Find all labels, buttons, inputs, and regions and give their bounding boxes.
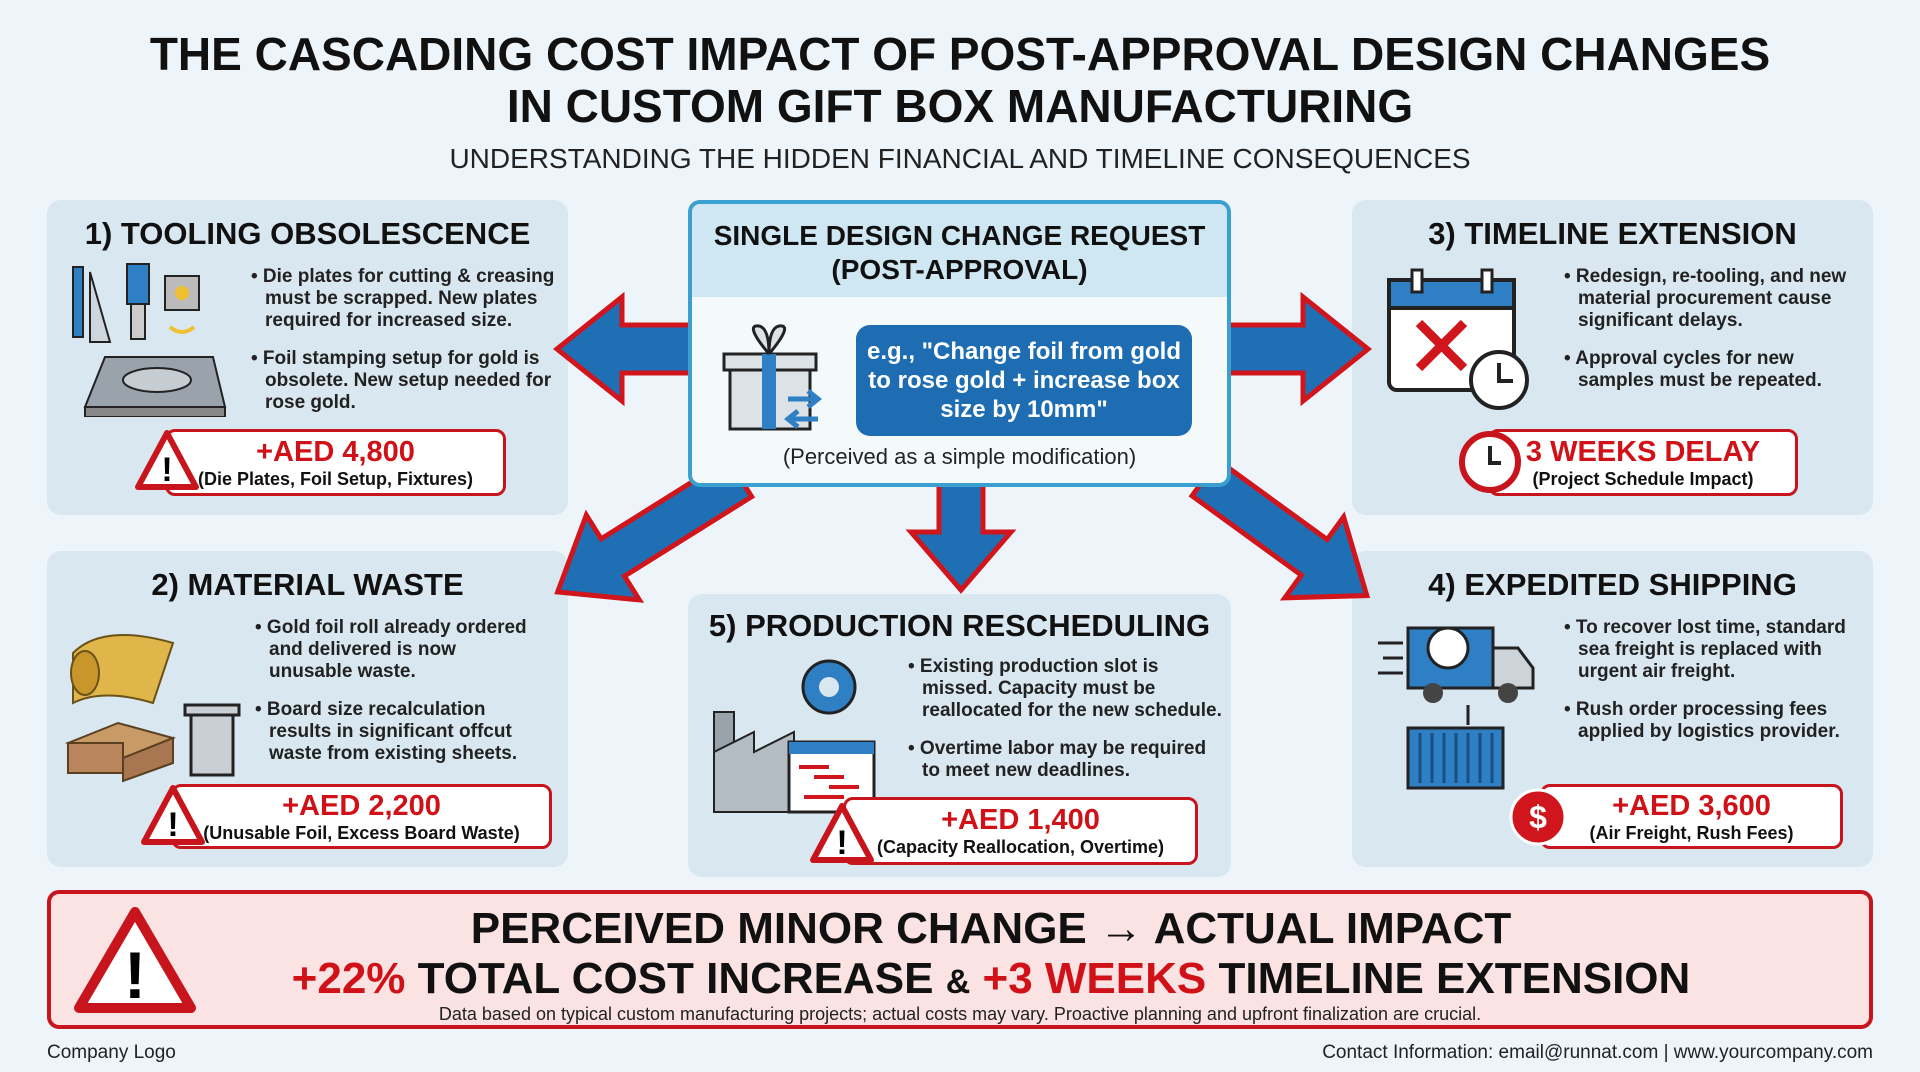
icon: warning: ! [167,806,179,844]
footer: logo: Company Logo [47,1042,176,1063]
icon: warning [141,785,205,845]
bullets [908,656,1222,781]
bullets: • Board size recalculation results in significant offcut waste from existing sheets. [255,699,517,764]
icon: warning: ! [836,824,848,862]
icon: truck and container [1378,626,1534,790]
icon: clock [1459,431,1521,493]
arrow: down [911,482,1011,590]
heading: (POST-APPROVAL) [831,254,1088,285]
banner headline [292,904,1690,1003]
panel: center change request [688,200,1231,487]
cost callout [843,797,1198,865]
panel: timeline extension [1352,200,1873,515]
cost callout: (Die Plates, Foil Setup, Fixtures) [198,469,473,489]
banner headline: +22% TOTAL COST INCREASE & +3 WEEKS TIMELINE EXTENSION [292,954,1690,1003]
bullets: • Redesign, re-tooling, and new material procurement cause significant delays. [1564,266,1846,331]
icon: foil roll and boards [65,634,240,782]
cost callout: (Capacity Reallocation, Overtime) [877,837,1164,857]
heading [692,204,1227,297]
bullets [1564,617,1846,742]
icon: dollar [1510,788,1564,846]
footer: contact: Contact Information: email@runnat.com | www.yourcompany.com [1322,1042,1873,1063]
bullets: • Rush order processing fees applied by logistics provider. [1564,699,1840,742]
icon: warning: ! [161,451,173,489]
bullets: • Approval cycles for new samples must be repeated. [1564,348,1822,391]
icon: factory and gear [713,660,876,814]
cost callout: +AED 2,200 [282,790,441,822]
icon: warning [810,803,874,863]
bullets: • To recover lost time, standard sea freight is replaced with urgent air freight. [1564,617,1846,682]
delay callout [1488,429,1798,496]
arrow: down-left [531,436,766,634]
delay callout: 3 WEEKS DELAY [1526,436,1760,468]
bullets [1564,266,1846,391]
heading: 4) EXPEDITED SHIPPING [1428,567,1797,602]
bottom banner [47,890,1873,1029]
panel: material waste [47,551,568,867]
cost callout: (Unusable Foil, Excess Board Waste) [203,823,520,843]
bullets: • Foil stamping setup for gold is obsolete. New setup needed for rose gold. [251,348,551,413]
icon: gift box [722,324,822,430]
arrow: down-right [1176,438,1396,636]
heading: 1) TOOLING OBSOLESCENCE [85,216,530,251]
bullets: • Die plates for cutting & creasing must be scrapped. New plates required for increased size. [251,266,554,331]
bullets: • Existing production slot is missed. Capacity must be reallocated for the new schedule. [908,656,1222,721]
panel: production rescheduling [688,594,1231,877]
bullets [255,617,527,764]
cost callout: +AED 3,600 [1612,790,1771,822]
panel: tooling obsolescence [47,200,568,515]
cost callout: (Air Freight, Rush Fees) [1589,823,1794,843]
heading: 3) TIMELINE EXTENSION [1428,216,1797,251]
cost callout [171,784,552,849]
cost callout [165,429,506,496]
cost callout [1540,784,1843,849]
cost callout: +AED 4,800 [256,436,415,468]
bullets [251,266,554,413]
heading: SINGLE DESIGN CHANGE REQUEST [714,220,1205,251]
delay callout: (Project Schedule Impact) [1532,469,1754,489]
title: IN CUSTOM GIFT BOX MANUFACTURING [507,80,1413,132]
icon: warning large [74,907,196,1013]
arrow: left [557,297,700,401]
bullets: • Gold foil roll already ordered and delivered is now unusable waste. [255,617,527,682]
disclaimer: Data based on typical custom manufacturing projects; actual costs may vary. Proactive planning and upfront finalization are crucial. [439,1004,1481,1024]
icon: tools [72,263,226,417]
heading: 2) MATERIAL WASTE [151,567,464,602]
caption: (Perceived as a simple modification) [783,444,1136,469]
speech bubble: e.g., "Change foil from gold to rose gold + increase box size by 10mm" [867,338,1181,423]
panel: expedited shipping [1352,551,1873,867]
title: THE CASCADING COST IMPACT OF POST-APPROVAL DESIGN CHANGES [150,28,1770,80]
cost callout: +AED 1,400 [941,804,1100,836]
title [150,28,1770,132]
banner headline: PERCEIVED MINOR CHANGE → ACTUAL IMPACT [471,904,1511,953]
icon: warning [135,430,199,490]
icon: warning large: ! [124,938,146,1012]
arrow: right [1221,297,1368,401]
bullets: • Overtime labor may be required to meet new deadlines. [908,738,1206,781]
icon: dollar: $ [1529,799,1547,835]
subtitle: UNDERSTANDING THE HIDDEN FINANCIAL AND TIMELINE CONSEQUENCES [449,143,1471,174]
icon: calendar [1387,268,1529,410]
heading: 5) PRODUCTION RESCHEDULING [709,608,1210,643]
